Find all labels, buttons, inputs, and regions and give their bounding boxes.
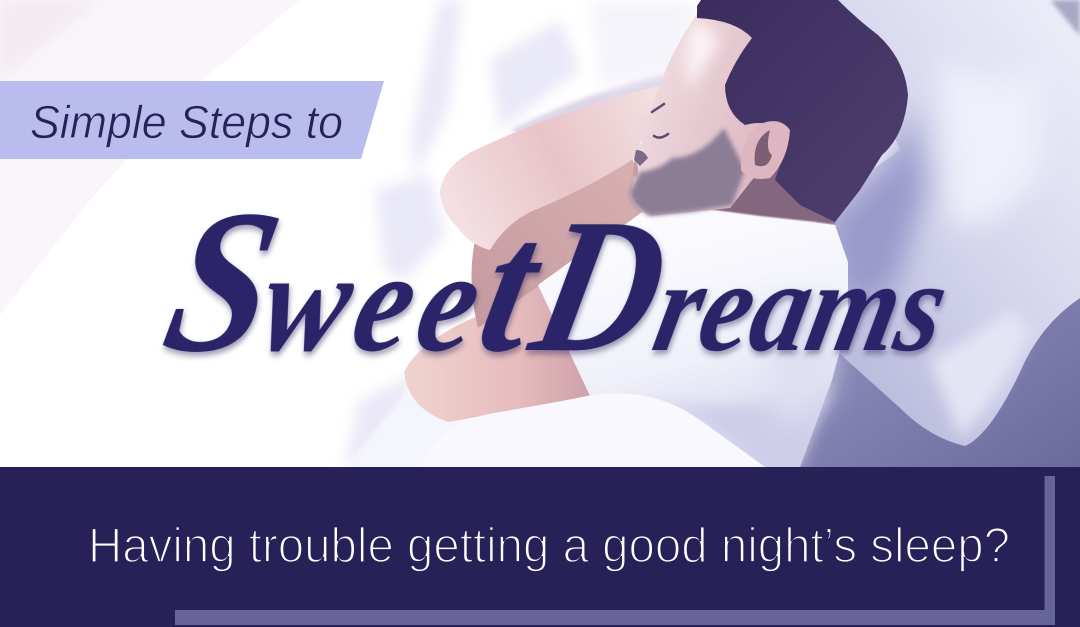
pillow	[815, 0, 1080, 446]
decorative corner bracket	[175, 476, 1055, 625]
banner: Simple Steps to: Simple Steps to	[30, 96, 343, 148]
lower arm	[404, 285, 592, 422]
bed surface, lower right	[795, 270, 1080, 467]
photo: man sleeping on white bedding	[0, 0, 1080, 467]
eye and eyebrow	[652, 104, 668, 138]
upper forearm	[440, 85, 662, 250]
title: Sweet Dreams: t	[465, 182, 597, 392]
title: Sweet Dreams: S	[149, 169, 297, 395]
subtitle: Having trouble getting a good night’s sleep?	[88, 519, 1010, 573]
banner: Simple Steps to	[0, 81, 384, 159]
shirt	[538, 208, 848, 467]
title: Sweet Dreams	[149, 169, 974, 395]
title: Sweet Dreams: reams	[643, 235, 960, 378]
title: Sweet Dreams: wee	[249, 221, 502, 381]
blanket	[420, 393, 765, 467]
face	[628, 14, 780, 216]
sheet below arm	[345, 350, 470, 467]
title: Sweet Dreams: D	[515, 179, 685, 392]
beard	[630, 128, 745, 216]
ear	[741, 121, 790, 179]
band: dark footer	[0, 467, 1080, 627]
neck	[700, 120, 835, 224]
hair	[697, 0, 908, 222]
middle forearm	[471, 150, 642, 328]
